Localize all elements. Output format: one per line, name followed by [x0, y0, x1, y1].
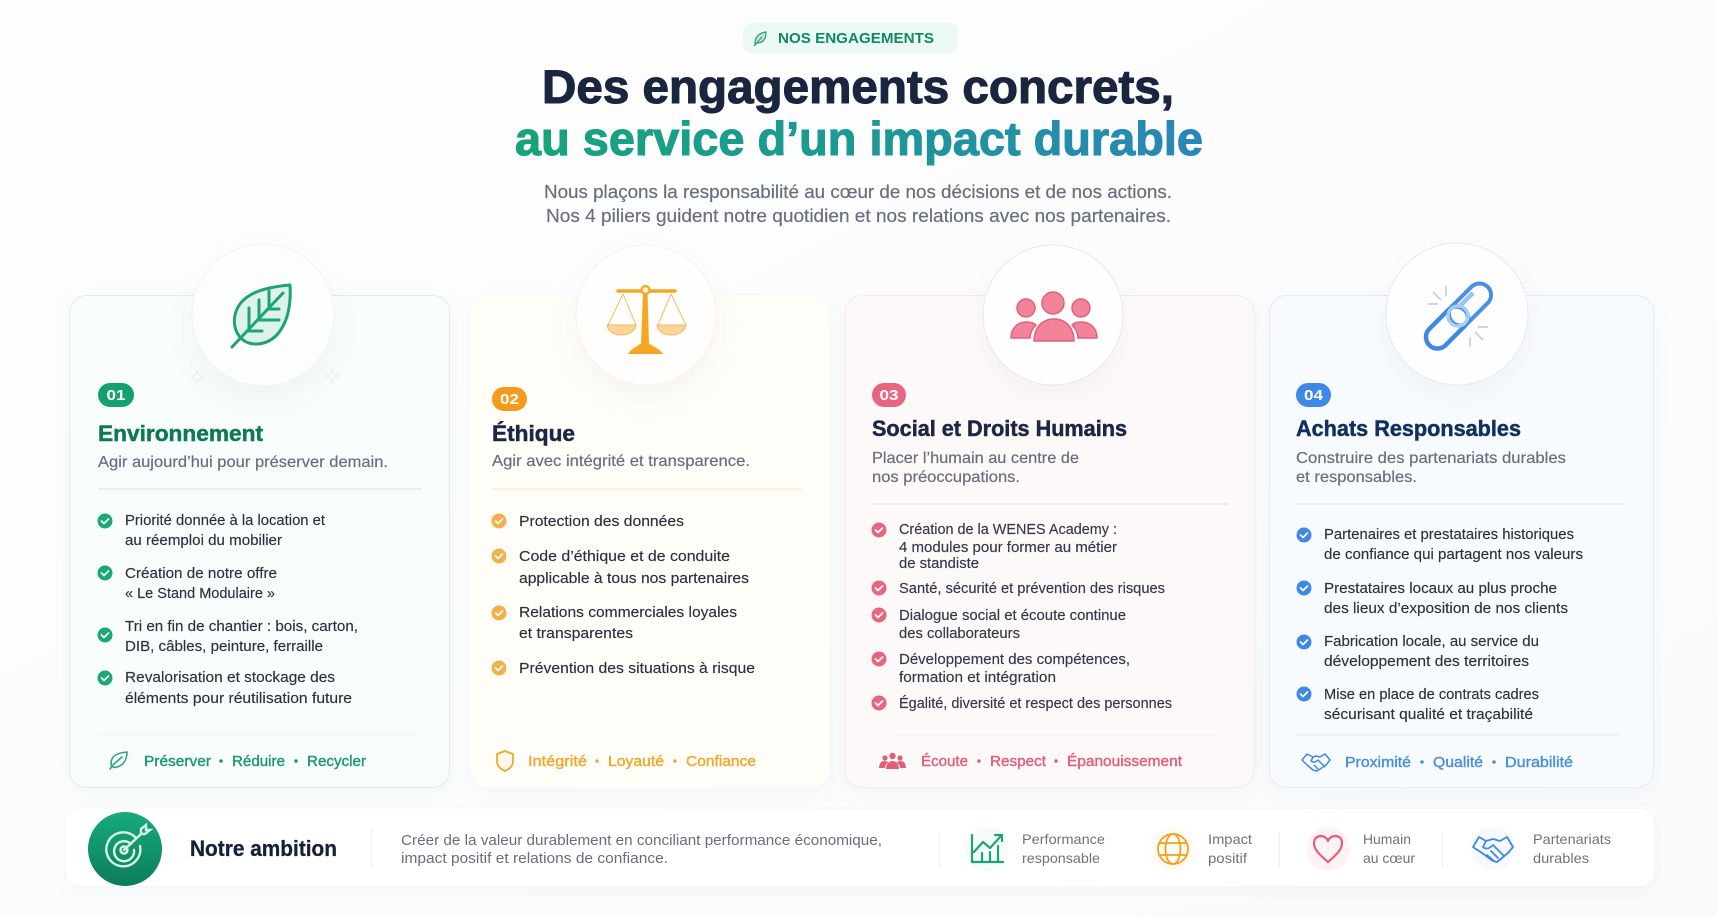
list: Prestataires locaux au plus proche — [1324, 580, 1557, 597]
pillar: impact: positif — [1208, 850, 1247, 866]
footer values: Qualité — [1433, 755, 1483, 771]
footer values: Loyauté — [608, 754, 664, 770]
footer values: Proximité — [1345, 755, 1411, 771]
tagline: Placer l’humain au centre de — [872, 450, 1079, 467]
footer values: Respect — [990, 754, 1046, 770]
pillar: performance — [965, 827, 1105, 871]
list: Santé, sécurité et prévention des risques — [899, 581, 1165, 597]
badge 03 — [872, 383, 906, 407]
list: des collaborateurs — [899, 626, 1020, 642]
eyebrow pill: nos engagements: NOS ENGAGEMENTS — [778, 30, 934, 47]
list: DIB, câbles, peinture, ferraille — [125, 638, 323, 655]
footer values: Recycler — [307, 754, 366, 770]
badge 03: 03 — [880, 388, 898, 404]
heading: Environnement — [98, 421, 264, 446]
footer values: Écoute — [921, 753, 968, 770]
footer values: Réduire — [232, 754, 285, 770]
list: des lieux d’exposition de nos clients — [1324, 600, 1568, 617]
icon: people in circle — [983, 245, 1123, 385]
pillar: performance: responsable — [1022, 850, 1100, 866]
panel: notre ambition — [66, 809, 1654, 886]
footer values — [879, 753, 1182, 770]
list: sécurisant qualité et traçabilité — [1324, 706, 1533, 723]
list: applicable à tous nos partenaires — [519, 570, 749, 587]
tagline: Agir aujourd’hui pour préserver demain. — [98, 454, 388, 471]
pillar: impact — [1151, 827, 1252, 871]
footer values — [110, 752, 366, 770]
heading: Éthique — [492, 421, 575, 446]
footer values: Confiance — [686, 754, 756, 770]
list — [872, 522, 1172, 712]
list: « Le Stand Modulaire » — [125, 585, 275, 602]
list: Tri en fin de chantier : bois, carton, — [125, 618, 358, 635]
list: Relations commerciales loyales — [519, 604, 737, 621]
title — [515, 60, 1203, 165]
pillar: humain: au cœur — [1363, 850, 1415, 866]
badge 04: 04 — [1304, 388, 1323, 404]
icon: leaf in circle — [191, 244, 339, 386]
pillar: partenariats: durables — [1533, 850, 1589, 866]
badge 01: 01 — [106, 388, 126, 404]
list: éléments pour réutilisation future — [125, 690, 352, 707]
icon: chain link in circle — [1386, 243, 1528, 385]
list: Code d’éthique et de conduite — [519, 548, 730, 565]
pillar: humain — [1306, 827, 1415, 871]
footer values: Intégrité — [528, 754, 587, 770]
list: 4 modules pour former au métier — [899, 540, 1117, 556]
footer values — [497, 751, 756, 771]
list — [98, 512, 358, 707]
tagline — [872, 450, 1079, 486]
pillar: performance: Performance — [1022, 831, 1105, 847]
list: Protection des données — [519, 513, 684, 530]
list: de confiance qui partagent nos valeurs — [1324, 546, 1583, 563]
list: Dialogue social et écoute continue — [899, 608, 1126, 624]
list: Mise en place de contrats cadres — [1324, 686, 1539, 703]
list: Développement des compétences, — [899, 652, 1130, 668]
pillar: partenariats — [1471, 827, 1611, 871]
panel: ethique — [470, 245, 829, 788]
list: Création de notre offre — [125, 565, 277, 582]
header — [515, 23, 1203, 226]
footer values — [1302, 754, 1573, 771]
heading: Social et Droits Humains — [872, 416, 1127, 441]
list: Création de la WENES Academy : — [899, 522, 1117, 538]
tagline: Construire des partenariats durables — [1296, 450, 1566, 467]
eyebrow pill: nos engagements — [743, 23, 958, 53]
heading: Achats Responsables — [1296, 416, 1521, 441]
ambition text: impact positif et relations de confiance. — [401, 850, 668, 867]
icon: target — [88, 812, 162, 886]
list: Fabrication locale, au service du — [1324, 633, 1539, 650]
list — [1296, 526, 1583, 723]
icon: scales in circle — [576, 245, 716, 385]
tagline: nos préoccupations. — [872, 469, 1020, 486]
ambition text: Créer de la valeur durablement en conciliant performance économique, — [401, 832, 882, 849]
panel: achats — [1270, 243, 1654, 788]
tagline: et responsables. — [1296, 469, 1417, 486]
list: Partenaires et prestataires historiques — [1324, 526, 1574, 543]
list: Prévention des situations à risque — [519, 660, 755, 677]
badge 02: 02 — [500, 392, 519, 408]
ambition text — [401, 832, 882, 867]
pillar: humain: Humain — [1363, 831, 1411, 847]
list: et transparentes — [519, 625, 633, 642]
list — [492, 513, 755, 677]
pillar: partenariats: Partenariats — [1533, 831, 1611, 847]
list: développement des territoires — [1324, 653, 1529, 670]
list: Priorité donnée à la location et — [125, 512, 326, 529]
tagline — [1296, 450, 1566, 486]
list: Revalorisation et stockage des — [125, 669, 335, 686]
panel: social — [845, 245, 1254, 788]
list: au réemploi du mobilier — [125, 532, 282, 549]
title: Des engagements concrets, — [542, 60, 1174, 113]
list: formation et intégration — [899, 670, 1056, 686]
subtitle — [544, 181, 1172, 226]
title: au service d’un impact durable — [515, 112, 1203, 165]
badge 01 — [98, 383, 134, 407]
subtitle: Nous plaçons la responsabilité au cœur de nos décisions et de nos actions. — [544, 181, 1172, 202]
badge 04 — [1296, 383, 1331, 407]
footer values: Préserver — [144, 754, 211, 770]
tagline: Agir avec intégrité et transparence. — [492, 453, 750, 470]
footer values: Épanouissement — [1067, 753, 1182, 770]
list: de standiste — [899, 556, 979, 572]
subtitle: Nos 4 piliers guident notre quotidien et nos relations avec nos partenaires. — [546, 205, 1171, 226]
panel: environnement — [70, 244, 450, 788]
footer values: Durabilité — [1505, 755, 1573, 771]
badge 02 — [492, 387, 527, 411]
list: Égalité, diversité et respect des personnes — [899, 695, 1172, 712]
heading: Notre ambition — [190, 836, 337, 861]
pillar: impact: Impact — [1208, 831, 1252, 847]
